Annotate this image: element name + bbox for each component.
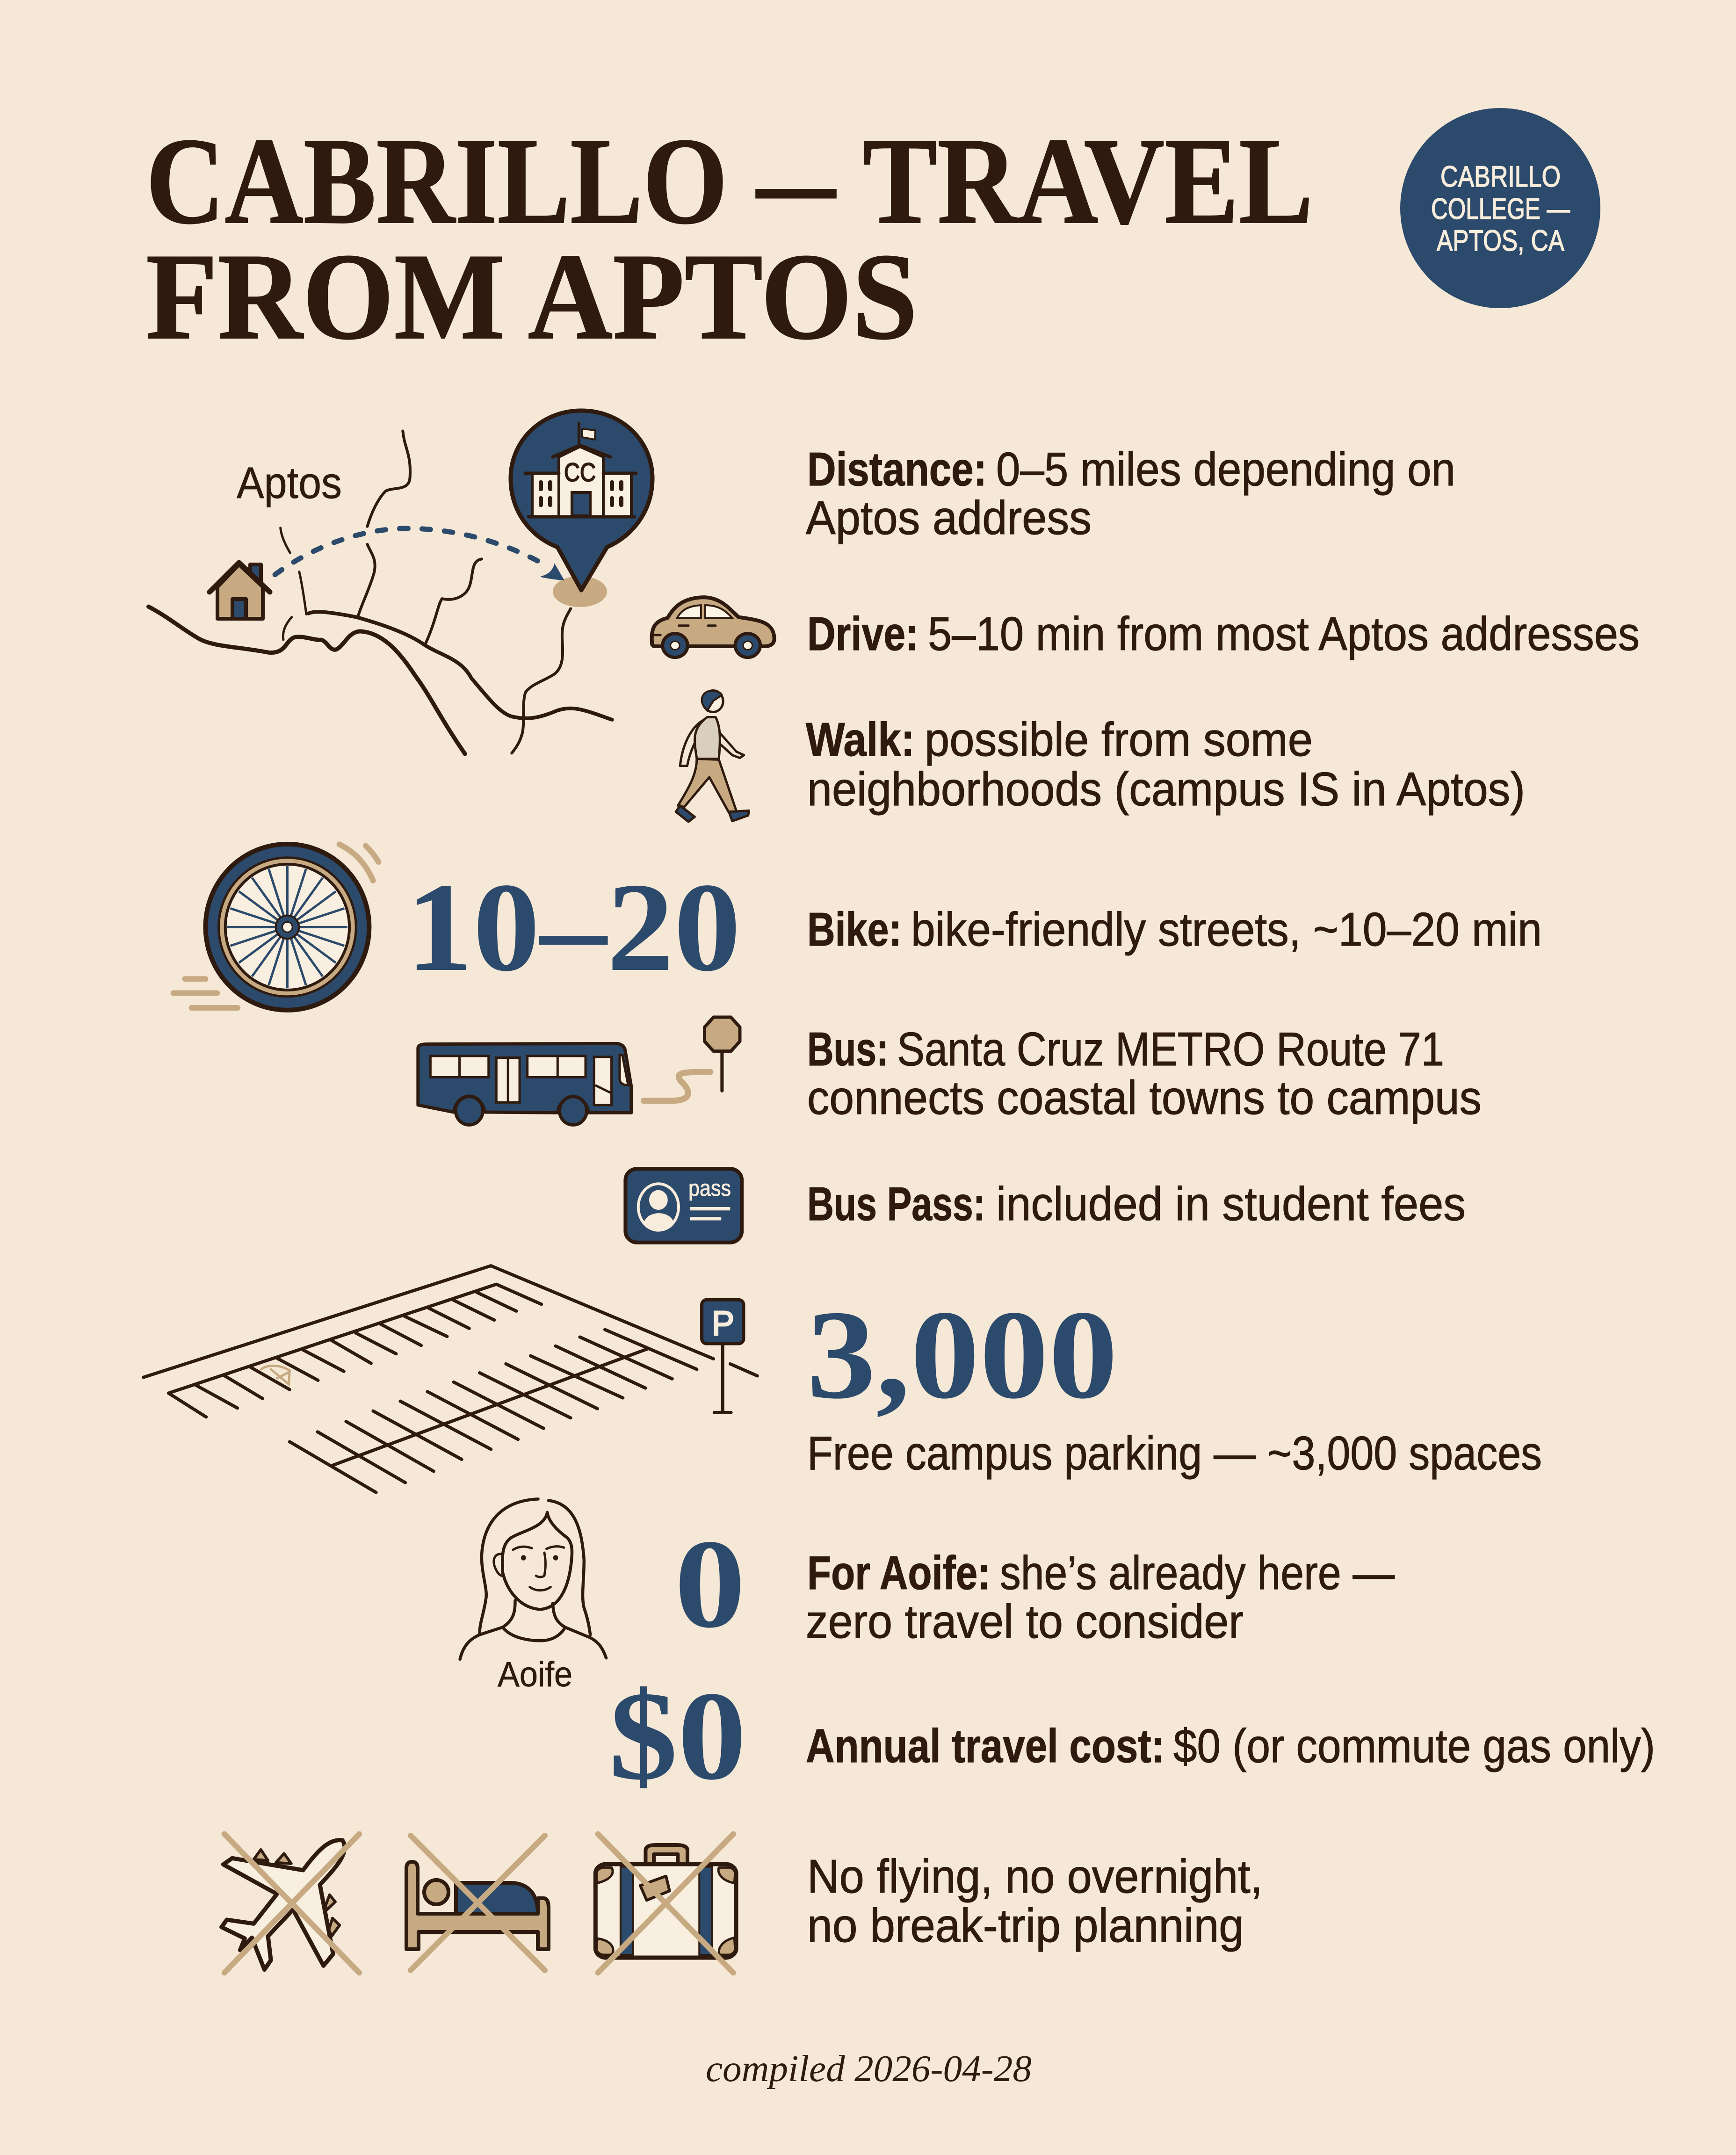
text: bus pass: Bus Pass:	[807, 1178, 985, 1230]
text: no flying	[807, 1851, 1263, 1952]
icon: Aoife portrait	[460, 1499, 606, 1694]
icon: bicycle wheel	[174, 844, 378, 1010]
text: distance: Distance:	[807, 443, 987, 496]
text: walk	[806, 714, 1525, 816]
badge: Cabrillo College	[1400, 108, 1600, 308]
text: for Aoife: zero travel to consider	[806, 1596, 1244, 1648]
text: drive: Drive:	[807, 608, 919, 660]
text: for Aoife	[806, 1547, 1395, 1648]
text: distance: Aptos address	[806, 492, 1092, 544]
badge: Cabrillo College: APTOS, CA	[1437, 224, 1564, 257]
text: bus	[807, 1023, 1482, 1124]
arrow: dashed route	[275, 528, 564, 580]
title: TRAVEL	[863, 113, 1313, 250]
icon: parking sign	[702, 1300, 744, 1412]
label: CC: CC	[564, 457, 596, 487]
title	[146, 113, 1313, 365]
text: for Aoife: For Aoife:	[807, 1547, 991, 1599]
icon: house	[210, 563, 270, 619]
stat: 3,000: 3,000	[807, 1284, 1118, 1425]
stat: 0: 0	[674, 1513, 745, 1654]
text: distance	[806, 443, 1455, 544]
text: bike: bike-friendly streets, ~10–20 min	[911, 904, 1542, 956]
text: no flying: no break-trip planning	[807, 1900, 1244, 1952]
icon: bus pass card	[625, 1169, 742, 1243]
text: bus: connects coastal towns to campus	[807, 1072, 1482, 1124]
text: bus pass: included in student fees	[996, 1178, 1466, 1230]
text: walk: Walk:	[806, 714, 915, 766]
icon: crossed-out plane	[222, 1834, 359, 1973]
text: distance: 0–5 miles depending on	[996, 443, 1455, 496]
chart: parking lot drawing	[144, 1266, 757, 1492]
badge: Cabrillo College: CABRILLO	[1440, 160, 1561, 193]
icon: location pin with school	[511, 411, 652, 607]
text: bus: Santa Cruz METRO Route 71	[897, 1023, 1444, 1076]
stat: $0: $0	[609, 1665, 746, 1806]
text: annual travel cost: Annual travel cost:	[806, 1720, 1165, 1772]
title: FROM APTOS	[146, 228, 918, 365]
text: bike: Bike:	[807, 904, 902, 956]
panel: map from Aptos to campus	[149, 411, 652, 754]
label: Aoife: Aoife	[498, 1655, 572, 1694]
text: walk: neighborhoods (campus IS in Aptos)	[807, 763, 1525, 816]
title: CABRILLO	[146, 113, 728, 250]
title: —	[755, 113, 837, 250]
text: parking: Free campus parking — ~3,000 spaces	[807, 1427, 1542, 1480]
text: for Aoife: she’s already here —	[1000, 1547, 1395, 1599]
text: annual travel cost: $0 (or commute gas only)	[1173, 1720, 1655, 1772]
icon: parking sign: P	[712, 1304, 734, 1343]
icon: bus with stop	[418, 1017, 740, 1125]
icon: bus pass card: pass	[688, 1176, 731, 1201]
map label: Aptos: Aptos	[237, 458, 342, 508]
footer: compiled date: compiled 2026-04-28	[706, 2048, 1032, 2090]
icon: crossed-out bed	[406, 1836, 549, 1970]
icon: car	[652, 597, 774, 658]
text: walk: possible from some	[925, 714, 1313, 766]
text: no flying: No flying, no overnight,	[807, 1851, 1263, 1903]
roads	[149, 431, 612, 754]
stat: 10–20: 10–20	[406, 857, 741, 998]
badge: Cabrillo College: COLLEGE —	[1431, 193, 1570, 225]
text: bus: Bus:	[807, 1023, 889, 1076]
text: drive: 5–10 min from most Aptos addresses	[928, 608, 1640, 660]
icon: walking person	[676, 691, 749, 822]
icon: crossed-out suitcase	[595, 1834, 736, 1973]
